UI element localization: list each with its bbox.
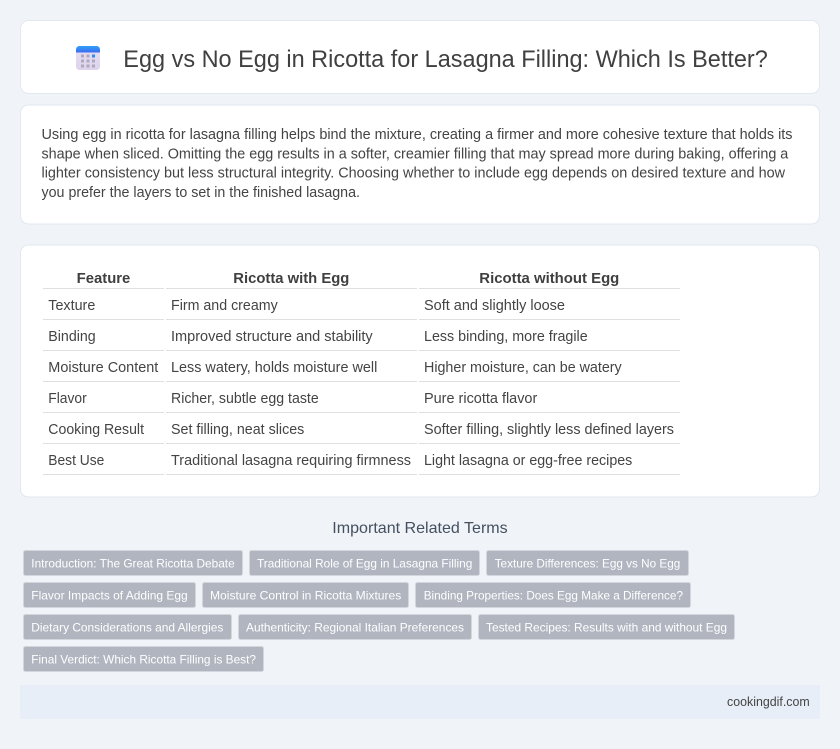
panel: intro paragraph — [20, 105, 820, 224]
row: binding: Improved structure and stability — [171, 329, 374, 345]
tag: introduction: Introduction: The Great Ricotta Debate — [31, 556, 235, 570]
header card — [20, 20, 820, 94]
row: moisture content: Moisture Content — [48, 360, 158, 376]
row: flavor: Flavor — [48, 391, 87, 407]
tag: tested recipes — [478, 614, 734, 640]
tag: moisture control — [202, 582, 408, 608]
table header row: Ricotta without Egg — [479, 271, 619, 287]
panel: intro paragraph: Using egg in ricotta for lasagna filling helps bind the mixture, creating a firmer and more cohesive texture that holds its — [42, 127, 792, 143]
row: texture: Firm and creamy — [171, 298, 278, 314]
heading: important related terms: Important Related Terms — [332, 520, 508, 537]
row: flavor: Pure ricotta flavor — [424, 391, 537, 407]
tag: flavor impacts — [24, 582, 196, 608]
tag: authenticity: Authenticity: Regional Italian Preferences — [246, 620, 464, 634]
row: flavor: Richer, subtle egg taste — [171, 391, 319, 407]
tag: tested recipes: Tested Recipes: Results with and without Egg — [486, 620, 727, 634]
tag: texture differences: Texture Differences: Egg vs No Egg — [495, 556, 680, 570]
table header row: Feature — [77, 271, 130, 287]
footer — [20, 685, 820, 719]
row: best use: Best Use — [48, 453, 104, 469]
panel: related term tags — [24, 550, 734, 672]
icon: calendar — [76, 46, 100, 70]
row: cooking result — [43, 422, 680, 444]
tag: binding properties — [416, 582, 690, 608]
row: binding: Binding — [48, 329, 96, 345]
row: moisture content — [43, 360, 680, 382]
tag: moisture control: Moisture Control in Ricotta Mixtures — [210, 588, 401, 602]
tag: final verdict: Final Verdict: Which Ricotta Filling is Best? — [31, 652, 256, 666]
row: cooking result: Set filling, neat slices — [171, 422, 304, 438]
tag: authenticity — [238, 614, 472, 640]
row: binding: Less binding, more fragile — [424, 329, 588, 345]
panel: intro paragraph: shape when sliced. Omitting the egg results in a softer, creamier filling that may spread more during baking, offering a — [42, 146, 788, 162]
panel: comparison table — [20, 245, 820, 497]
footer: cookingdif.com — [727, 694, 810, 709]
row: cooking result: Cooking Result — [48, 422, 144, 438]
row: binding — [43, 329, 680, 351]
row: cooking result: Softer filling, slightly less defined layers — [424, 422, 674, 438]
row: moisture content: Less watery, holds moisture well — [171, 360, 377, 376]
tag: flavor impacts: Flavor Impacts of Adding Egg — [31, 588, 188, 602]
title: Egg vs No Egg in Ricotta for Lasagna Filling: Which Is Better? — [123, 46, 768, 73]
tag: binding properties: Binding Properties: Does Egg Make a Difference? — [424, 588, 683, 602]
row: best use — [43, 453, 680, 475]
tag: texture differences — [486, 550, 688, 576]
table header row — [43, 271, 680, 289]
row: best use: Light lasagna or egg-free recipes — [424, 453, 632, 469]
row: texture — [43, 298, 680, 320]
tag: dietary considerations — [24, 614, 232, 640]
row: best use: Traditional lasagna requiring firmness — [171, 453, 411, 469]
panel: intro paragraph: lighter consistency but less structural integrity. Choosing whether to include egg depends on desired texture and how — [42, 166, 786, 182]
row: moisture content: Higher moisture, can be watery — [424, 360, 622, 376]
tag: dietary considerations: Dietary Considerations and Allergies — [31, 620, 223, 634]
tag: traditional role — [250, 550, 480, 576]
row: flavor — [43, 391, 680, 413]
panel: intro paragraph: you prefer the layers to set in the finished lasagna. — [42, 185, 360, 201]
tag: final verdict — [24, 646, 264, 672]
row: texture: Soft and slightly loose — [424, 298, 565, 314]
table header row: Ricotta with Egg — [233, 271, 349, 287]
tag: traditional role: Traditional Role of Egg in Lasagna Filling — [257, 556, 472, 570]
tag: introduction — [24, 550, 242, 576]
row: texture: Texture — [48, 298, 95, 314]
